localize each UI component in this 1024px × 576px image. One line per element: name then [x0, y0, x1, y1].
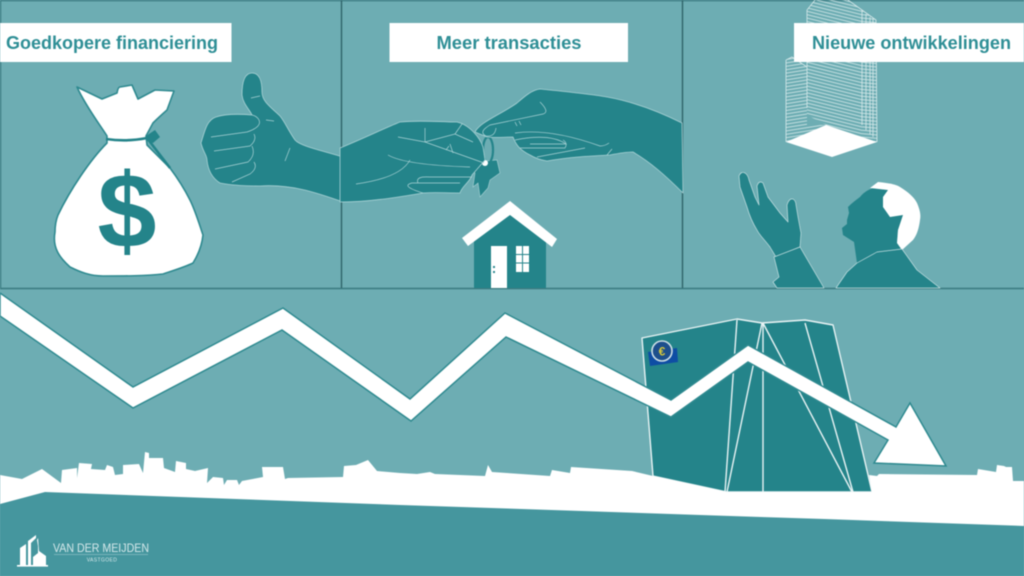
icon: man looking up: [836, 182, 940, 288]
logo subtext: VASTGOED: [87, 558, 117, 564]
heading: meer transacties: Meer transacties: [436, 33, 582, 53]
heading: nieuwe ontwikkelingen: Nieuwe ontwikkelingen: [812, 33, 1011, 53]
icon: key ring and keys: [468, 137, 500, 197]
panel: meer transacties: [340, 89, 683, 288]
logo text: VAN DER MEIJDEN: [53, 543, 149, 555]
icon: ECB building: [642, 319, 872, 492]
icon: euro flag: €: [659, 344, 666, 358]
icon: money bag: $: [98, 152, 156, 270]
icon: house: [462, 201, 557, 288]
logo: van der meijden vastgoed: [17, 535, 149, 567]
heading: nieuwe ontwikkelingen: [794, 23, 1024, 62]
panel: nieuwe ontwikkelingen: [739, 0, 940, 288]
icon: thumbs up hand: [201, 73, 343, 202]
heading: goedkopere financiering: Goedkopere financiering: [6, 33, 218, 53]
icon: logo buildings: [17, 535, 48, 567]
panel: goedkopere financiering: [54, 73, 343, 276]
icon: hand giving keys: [340, 121, 485, 202]
skyline and ground: [0, 452, 1024, 576]
chart: falling arrow: [0, 293, 946, 466]
heading: meer transacties: [390, 23, 628, 62]
icon: raised hand: [739, 172, 824, 288]
icon: hand receiving keys: [475, 89, 683, 193]
icon: tower: [786, 0, 877, 157]
panel: frame and dividers: [0, 0, 1024, 288]
icon: euro flag: [648, 341, 678, 366]
heading: goedkopere financiering: [0, 23, 232, 62]
icon: money bag: [54, 85, 203, 276]
